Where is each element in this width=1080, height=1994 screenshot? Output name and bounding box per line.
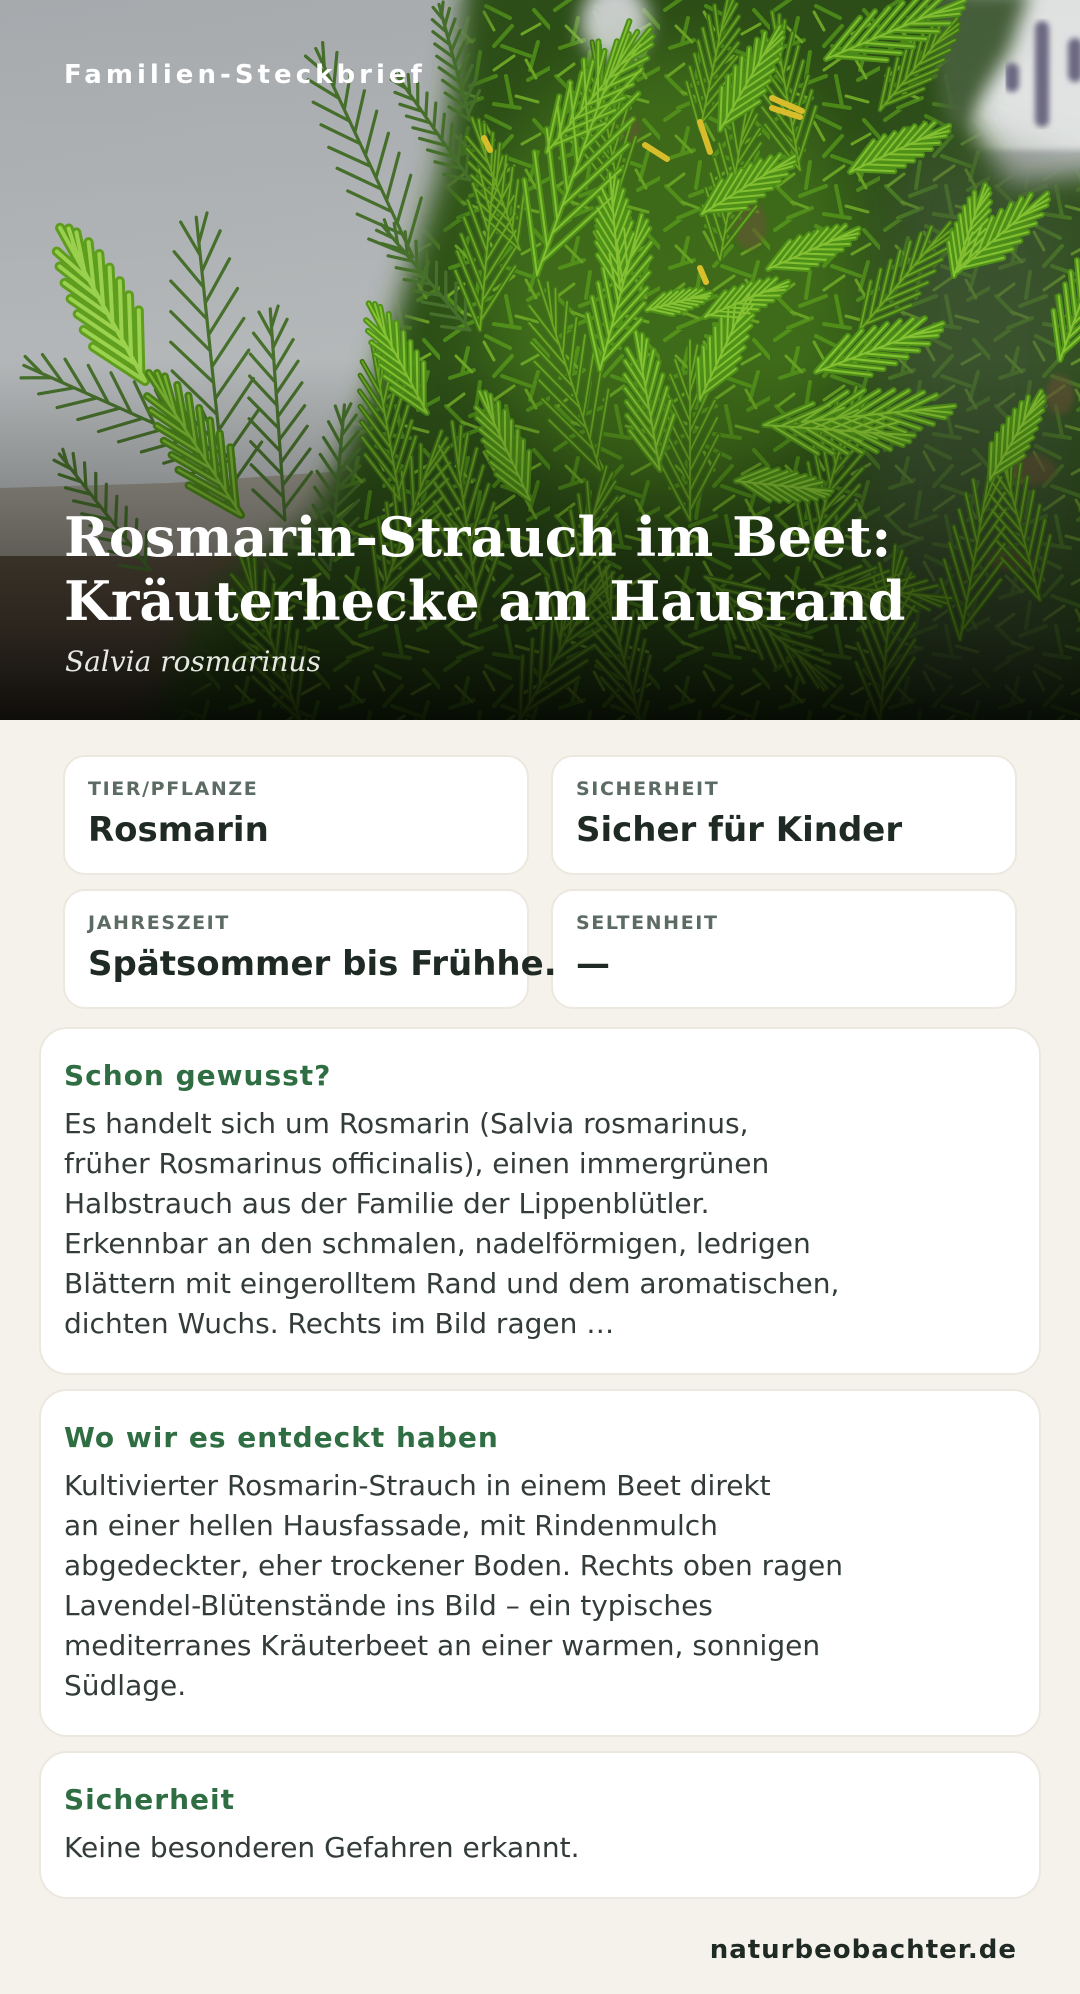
mid green sprig highlights bbox=[211, 0, 1066, 735]
card: Jahreszeit: Spätsommer bis Frühhe. bbox=[88, 944, 557, 984]
card: Tier/Pflanze: Rosmarin bbox=[88, 810, 269, 850]
card: Jahreszeit: JAHRESZEIT bbox=[88, 912, 230, 934]
title: Rosmarin-Strauch im Beet: bbox=[64, 505, 891, 569]
panel: Schon gewusst: früher Rosmarinus officinalis), einen immergrünen bbox=[64, 1147, 769, 1180]
mulch bbox=[0, 556, 480, 720]
panel: Sicherheit: Sicherheit bbox=[64, 1783, 235, 1816]
bush blurred base bbox=[130, 0, 1080, 760]
panel: Schon gewusst: Es handelt sich um Rosmarin (Salvia rosmarinus, bbox=[64, 1107, 748, 1140]
card: Tier/Pflanze: TIER/PFLANZE bbox=[88, 778, 258, 800]
panel: Schon gewusst: Erkennbar an den schmalen, nadelförmigen, ledrigen bbox=[64, 1227, 811, 1260]
card: Sicherheit: Sicher für Kinder bbox=[576, 810, 902, 850]
brighter bush core bbox=[480, 50, 860, 510]
footer brand: naturbeobachter.de bbox=[710, 1935, 1017, 1965]
shading overlay bbox=[0, 0, 1080, 720]
panel: Sicherheit: Keine besonderen Gefahren erkannt. bbox=[64, 1831, 580, 1864]
panel: Wo wir es entdeckt haben: an einer hellen Hausfassade, mit Rindenmulch bbox=[64, 1509, 718, 1542]
panel: Schon gewusst bbox=[39, 1027, 1041, 1375]
panel: Schon gewusst: Schon gewusst? bbox=[64, 1059, 331, 1092]
yellow leaves bbox=[484, 98, 802, 282]
hero image: rosemary shrub at house wall bbox=[0, 0, 1080, 720]
card: Sicherheit bbox=[551, 755, 1017, 875]
card: Sicherheit: SICHERHEIT bbox=[576, 778, 719, 800]
panel: Wo wir es entdeckt haben: abgedeckter, eher trockener Boden. Rechts oben ragen bbox=[64, 1549, 843, 1582]
blurred green foliage top right bbox=[930, 0, 1030, 130]
kicker: Familien-Steckbrief bbox=[64, 60, 426, 90]
panel: Wo wir es entdeckt haben bbox=[39, 1389, 1041, 1737]
panel: Wo wir es entdeckt haben: Kultivierter Rosmarin-Strauch in einem Beet direkt bbox=[64, 1469, 771, 1502]
title bbox=[64, 505, 906, 633]
brown seedheads bbox=[620, 116, 1074, 570]
panel: Wo wir es entdeckt haben: Lavendel-Blütenstände ins Bild – ein typisches bbox=[64, 1589, 713, 1622]
panel: Wo wir es entdeckt haben: Südlage. bbox=[64, 1669, 186, 1702]
bush needle texture bbox=[194, 0, 1080, 720]
white wall top right bbox=[965, 0, 1080, 150]
wall bbox=[0, 0, 1080, 720]
blurred darker right side bbox=[860, 130, 1080, 720]
card: Seltenheit: — bbox=[576, 944, 610, 984]
title: Kräuterhecke am Hausrand bbox=[64, 569, 906, 633]
thin dark sprigs on wall bbox=[8, 0, 486, 583]
card: Seltenheit bbox=[551, 889, 1017, 1009]
panel: Sicherheit bbox=[39, 1751, 1041, 1899]
pale wall gap behind shrub bbox=[581, 0, 649, 62]
mid green sprigs bbox=[211, 0, 1066, 735]
panel: Wo wir es entdeckt haben: Wo wir es entdeckt haben bbox=[64, 1421, 499, 1454]
panel: Schon gewusst: Halbstrauch aus der Familie der Lippenblütler. bbox=[64, 1187, 709, 1220]
panel: Schon gewusst: dichten Wuchs. Rechts im Bild ragen … bbox=[64, 1307, 614, 1340]
bright sprig highlights bbox=[351, 0, 1080, 508]
foundation bbox=[0, 470, 380, 560]
chunky light green sprig at left bbox=[35, 214, 264, 530]
bright foreground sprigs bbox=[351, 0, 1080, 508]
card: Seltenheit: SELTENHEIT bbox=[576, 912, 719, 934]
panel: Schon gewusst: Blättern mit eingerolltem Rand und dem aromatischen, bbox=[64, 1267, 839, 1300]
panel: Wo wir es entdeckt haben: mediterranes Kräuterbeet an einer warmen, sonnigen bbox=[64, 1629, 820, 1662]
lavender flowers bbox=[1012, 28, 1075, 120]
card: Jahreszeit bbox=[63, 889, 529, 1009]
hero photo panel bbox=[0, 0, 1080, 720]
card: Tier/Pflanze bbox=[63, 755, 529, 875]
scientific name: Salvia rosmarinus bbox=[65, 645, 321, 678]
